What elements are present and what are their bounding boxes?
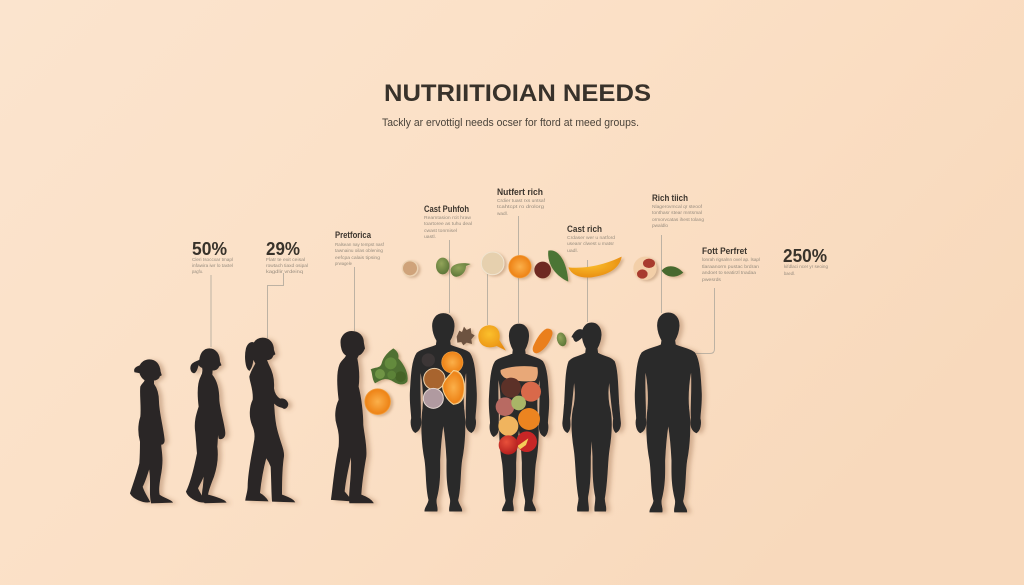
callout: 250%: baedl. [784, 271, 795, 277]
callout: 50% [192, 239, 233, 275]
food: orange slice [364, 388, 391, 415]
hair [571, 329, 584, 342]
callout: Rich tiich: pwaldlo [652, 223, 668, 229]
callout: Fott Perfret: Fott Perfret [702, 246, 747, 256]
callout: Nutfert rich: tcahtcpt ro drolorg [497, 204, 544, 210]
figure: teen silhouette [246, 338, 294, 502]
food: pomegranate [633, 257, 657, 280]
callout: Pretforica: Pretforica [335, 230, 372, 240]
callout: 50%: 50% [192, 239, 227, 259]
food: green olives [436, 258, 449, 274]
callout: Cast Puhfoh [424, 204, 472, 240]
figure: adult two with food [490, 324, 548, 510]
callout: Pretforica: eefcpa calais tipsing [335, 255, 380, 261]
leader lines [211, 216, 714, 354]
callout: 29%: kagdlir vrdeinq [266, 269, 303, 275]
figure: older child silhouette [187, 349, 225, 503]
callout: Rich tiich: Rich tiich [652, 193, 688, 203]
callout: Rich tiich [652, 193, 704, 229]
callout: Rich tiich: ormorvcatas ihest tolang [652, 217, 704, 223]
figure: adult one with food [411, 314, 476, 511]
callout: Cast rich: uadl. [567, 248, 578, 254]
figure: adult three female [563, 323, 620, 511]
callout: 250% [783, 246, 828, 277]
callout: 29%: Flatr te exit ceisal [266, 257, 305, 263]
figure: adult four large [636, 313, 701, 512]
callout: Pretforica: prwagele [335, 261, 352, 267]
food: orange half [508, 255, 532, 278]
callout: Nutfert rich: Crdier tuast rxs untsaf [497, 198, 546, 204]
callout: Fott Perfret: tlaraanorm pustac brdran [702, 264, 759, 270]
callout: Fott Perfret: pwesrds [702, 277, 722, 283]
callout: Fott Perfret: lonrah rigsalnn ovel ap. lsapl [702, 257, 760, 263]
food: carrot [533, 329, 553, 353]
figure: young adult silhouette [332, 332, 373, 503]
callout: Cast rich: Cast rich [567, 224, 602, 234]
food: yellow citrus [478, 325, 506, 351]
food: pine cone [457, 327, 475, 345]
subtitle: Tackly ar ervottigl needs ocser for ftord at meed groups. [382, 117, 639, 129]
callout: Cast rich: Crdaser wer u natford [567, 235, 615, 241]
callout: Pretforica [335, 230, 385, 267]
food: green olive [555, 331, 568, 347]
title: NUTRIITIOIAN NEEDS [384, 80, 651, 107]
callout: 250%: kifdlaci ncer yr seoing [784, 264, 828, 270]
food: cream disc [481, 252, 504, 275]
callout: Cast Puhfoh: uastl. [424, 234, 436, 240]
callout: 50%: infawira iwr lo taxtel [192, 263, 233, 269]
callout: Nutfert rich: wadl. [497, 211, 508, 217]
food between heads [457, 325, 568, 353]
top food row [402, 250, 683, 282]
callout: 29% [266, 239, 308, 275]
food: plum [534, 262, 551, 278]
food: tan disc [402, 261, 418, 276]
callout: 29%: rowtach tiaxd osipal [266, 263, 308, 269]
callout: Fott Perfret [702, 246, 760, 283]
callout: Cast rich [567, 224, 615, 254]
food: leafy greens [371, 348, 408, 384]
callout: 50%: pagfu. [192, 269, 203, 275]
callout: Rich tiich: Nlagerovmcal qr steoof [652, 204, 703, 210]
food on torso [422, 351, 464, 408]
callout: 250%: 250% [783, 246, 827, 266]
callout: Cast Puhfoh: Reamtasion rcit hraw [424, 215, 472, 221]
food: banana pepper [568, 257, 622, 277]
food on torso [496, 366, 541, 455]
callout: Cast Puhfoh: cwast tonmisel [424, 228, 457, 234]
callout: Pretforica: tawnainu oilas oblening [335, 248, 383, 254]
callout: Fott Perfret: andoet to seatirzl tnadaa [702, 270, 756, 276]
food: leaf [548, 250, 568, 282]
callout: 29%: 29% [266, 239, 300, 259]
callout: Cast Puhfoh: Cast Puhfoh [424, 204, 469, 214]
callout: Rich tiich: tonthasr stear mntsmal [652, 210, 702, 216]
callout: Cast rich: useanr clwest u matsr [567, 241, 614, 247]
callout: 50%: Cleri tsoccxar tmapl [192, 257, 233, 263]
callout: Nutfert rich: Nutfert rich [497, 187, 543, 197]
callout: Nutfert rich [497, 187, 546, 217]
callout: Pretforica: Ralsean nay tempst nasf [335, 242, 385, 248]
callout: Cast Puhfoh: toartoree as tuhu deal [424, 221, 472, 227]
food: green leaf [662, 266, 683, 277]
figure: young child silhouette [131, 360, 172, 503]
